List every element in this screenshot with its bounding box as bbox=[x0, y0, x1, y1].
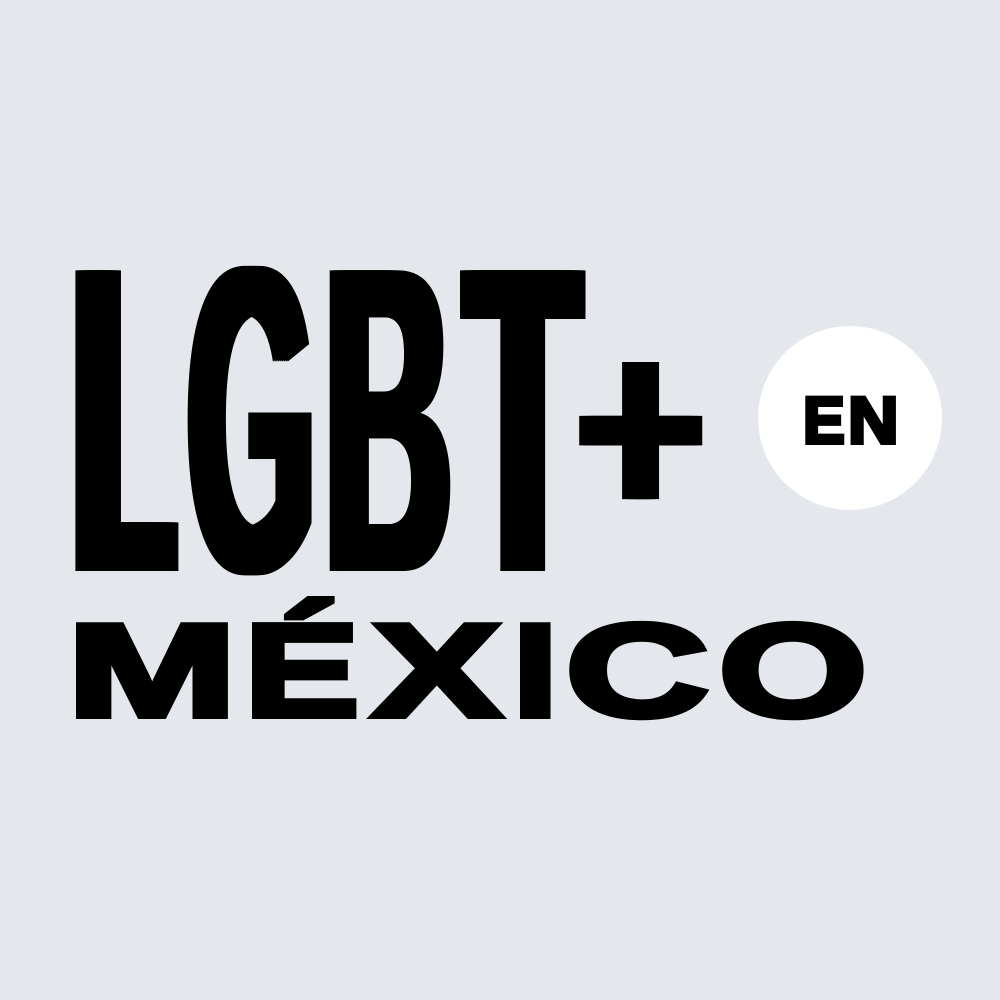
heading: MÉXICO: O bbox=[719, 596, 867, 744]
badge label bbox=[803, 384, 899, 458]
heading: MÉXICO bbox=[67, 596, 867, 745]
heading: MÉXICO: C bbox=[566, 596, 709, 744]
badge: EN bbox=[758, 326, 942, 510]
badge circle bbox=[758, 326, 942, 510]
heading: LGBT+: B bbox=[318, 175, 445, 664]
badge label: N bbox=[848, 384, 899, 458]
heading: LGBT+: G bbox=[181, 175, 307, 664]
heading: LGBT+ bbox=[65, 175, 702, 664]
heading: LGBT+: L bbox=[65, 175, 160, 664]
heading: LGBT+: T bbox=[458, 175, 569, 664]
heading: MÉXICO: I bbox=[513, 598, 558, 745]
heading: MÉXICO: M bbox=[67, 598, 237, 744]
heading: MÉXICO: X bbox=[372, 597, 501, 745]
heading: MÉXICO: É bbox=[244, 596, 359, 744]
heading: LGBT+: + bbox=[570, 277, 699, 578]
badge label: E bbox=[803, 384, 845, 457]
